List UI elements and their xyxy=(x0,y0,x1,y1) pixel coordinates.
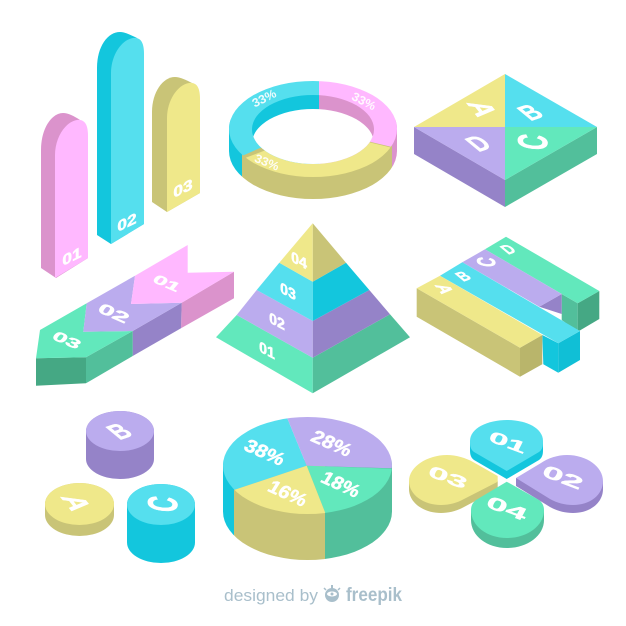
teardrop petal chart 01 02 03 04 xyxy=(409,420,603,548)
stacked stripes block chart A B C D: B xyxy=(452,269,476,284)
pie labels xyxy=(240,427,364,511)
petal 04 green xyxy=(471,482,544,548)
ring labels xyxy=(250,87,378,173)
diamond quadrant chart A B C D: B xyxy=(511,100,551,125)
pyramid chart xyxy=(216,223,410,393)
cylinder A: A xyxy=(52,494,99,512)
bar 01 pink xyxy=(41,113,88,278)
ring inner wall and hole xyxy=(252,95,374,164)
diamond quadrant chart A B C D: D xyxy=(459,131,499,156)
pie labels: 16% xyxy=(264,477,311,511)
petal 02 purple xyxy=(516,455,603,513)
arrow chart 01 02 03: 03 xyxy=(49,329,84,352)
bar 02 cyan xyxy=(97,32,144,244)
ring labels: 33% xyxy=(250,87,279,110)
stacked stripes block chart A B C D: A xyxy=(430,283,459,295)
petal 02 purple: 02 xyxy=(539,462,587,494)
credit text: designed by: designed by xyxy=(224,586,319,605)
petal 03 yellow xyxy=(409,455,498,513)
bar 01 pink: 01 xyxy=(62,243,82,269)
pie top face xyxy=(223,417,392,514)
cylinder B xyxy=(86,411,154,479)
pyramid chart: 02 xyxy=(269,310,285,335)
bar 03 yellow xyxy=(152,77,200,212)
footer credit xyxy=(224,585,402,606)
pie labels: 18% xyxy=(317,468,364,502)
stacked stripes block chart A B C D: C xyxy=(474,256,502,268)
diamond quadrant chart A B C D: C xyxy=(509,132,556,152)
cylinder C xyxy=(127,484,195,563)
bar 03 yellow: 03 xyxy=(173,175,193,201)
ring labels: 33% xyxy=(349,90,378,113)
pie labels: 38% xyxy=(240,436,289,470)
bar chart: rounded isometric bars xyxy=(41,32,200,278)
petal 03 yellow: 03 xyxy=(425,462,471,492)
stacked stripes block chart A B C D xyxy=(417,237,599,377)
diamond quadrant chart A B C D: A xyxy=(458,100,505,118)
bar 02 cyan: 02 xyxy=(117,209,137,235)
credit text: freepik: freepik xyxy=(346,585,402,606)
pyramid chart: 01 xyxy=(259,339,275,364)
cylinder A xyxy=(45,483,114,536)
petal 01 cyan: 01 xyxy=(486,428,530,457)
cylinder B: B xyxy=(100,419,140,444)
petal 04 green: 04 xyxy=(483,493,531,525)
pie side wall xyxy=(223,460,392,560)
cylinder chart A B C xyxy=(45,411,195,563)
ring chart: three 33% segments xyxy=(229,81,397,199)
cylinder C: C xyxy=(139,494,186,514)
pie labels: 28% xyxy=(307,427,356,461)
arrow chart 01 02 03: 01 xyxy=(149,272,184,295)
ring top face xyxy=(229,81,397,177)
diamond quadrant chart A B C D xyxy=(414,74,597,207)
petal 01 cyan xyxy=(470,420,543,479)
ring outer side wall xyxy=(229,120,397,199)
pyramid chart: 04 xyxy=(291,249,307,274)
pie chart 38 28 18 16 percent xyxy=(223,417,392,560)
arrow chart 01 02 03: 02 xyxy=(95,300,133,326)
arrow chart 01 02 03 xyxy=(36,245,234,386)
stacked stripes block chart A B C D: D xyxy=(497,242,521,257)
ring labels: 33% xyxy=(253,151,281,173)
pyramid chart: 03 xyxy=(280,280,296,305)
icon: freepik robot xyxy=(324,585,340,602)
